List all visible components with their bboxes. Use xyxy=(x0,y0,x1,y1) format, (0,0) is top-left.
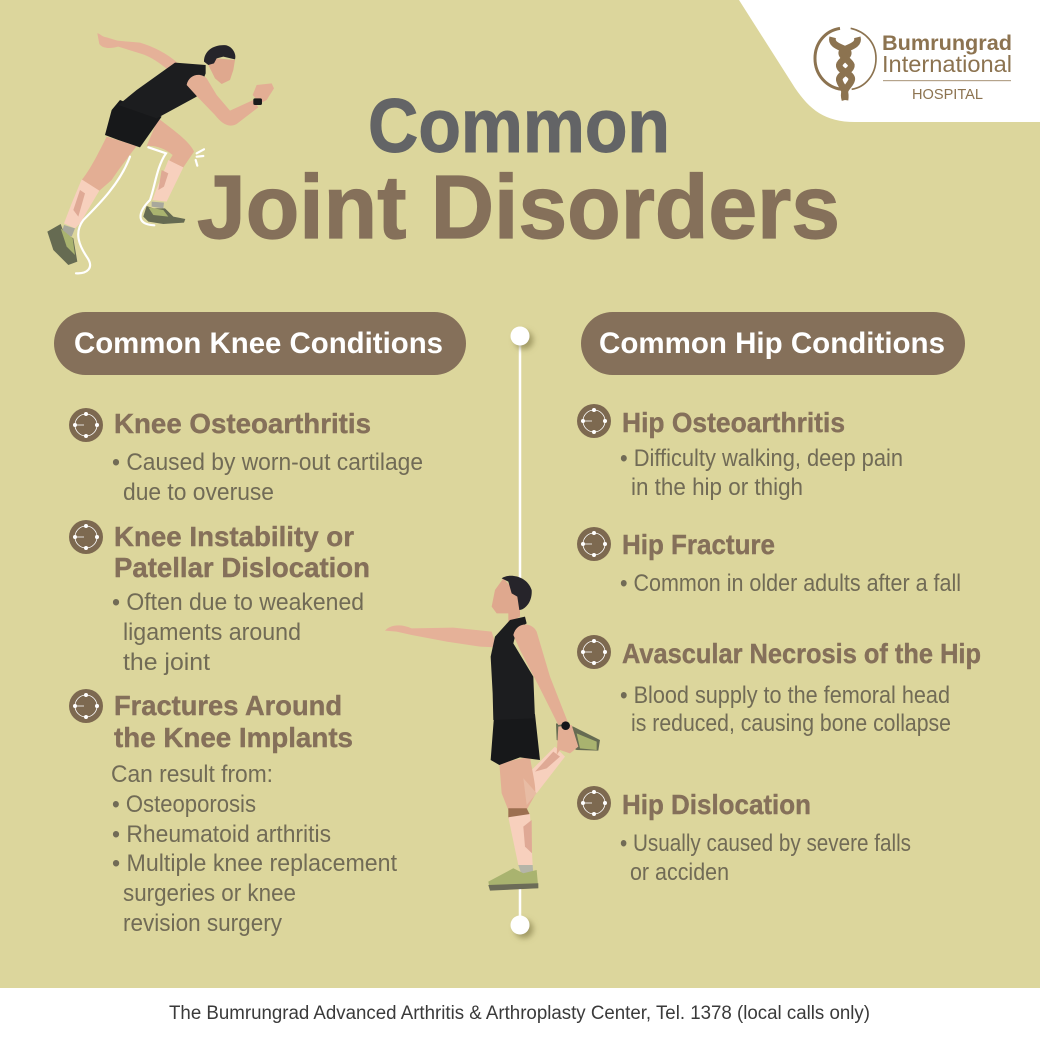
knee: osteoarthritis: Knee Osteoarthritis xyxy=(114,408,371,439)
logo wordmark: Bumrungrad xyxy=(882,32,1012,55)
knee: instability: Patellar Dislocation xyxy=(114,552,370,583)
hip: osteoarthritis: Hip Osteoarthritis xyxy=(622,407,845,438)
title: Common xyxy=(368,84,670,169)
knee: instability: ligaments around xyxy=(123,619,301,646)
hip: avascular necrosis: Avascular Necrosis of the Hip xyxy=(622,638,981,669)
hip: avascular necrosis: is reduced, causing bone collapse xyxy=(631,710,951,737)
pill: knee heading xyxy=(54,312,466,375)
knee: instability: the joint xyxy=(123,649,210,676)
footer: The Bumrungrad Advanced Arthritis & Arthroplasty Center, Tel. 1378 (local calls only) xyxy=(169,1003,870,1024)
hip: osteoarthritis: • Difficulty walking, deep pain xyxy=(620,445,903,472)
head xyxy=(208,58,235,84)
motion lines xyxy=(76,147,204,273)
back arm xyxy=(513,625,568,725)
knee: instability: • Often due to weakened xyxy=(112,589,364,616)
neck and face xyxy=(492,578,520,623)
hair xyxy=(502,576,532,610)
timeline line xyxy=(519,336,521,925)
knee: osteoarthritis xyxy=(69,408,423,506)
knee: fractures: • Osteoporosis xyxy=(112,791,256,818)
icon: hip dislocation xyxy=(577,786,611,820)
knee: osteoarthritis: • Caused by worn-out cartilage xyxy=(112,449,423,476)
icon: instability xyxy=(69,520,103,554)
knee: instability xyxy=(69,520,370,676)
timeline top dot xyxy=(510,326,530,346)
raised calf xyxy=(523,747,565,793)
footer xyxy=(0,988,1040,1040)
hand and watch xyxy=(557,725,578,755)
logo wordmark xyxy=(882,32,1012,103)
timeline bottom dot xyxy=(510,916,530,934)
hip: osteoarthritis xyxy=(577,404,903,501)
icon: fractures xyxy=(69,689,103,723)
title: Joint Disorders xyxy=(197,158,840,258)
knee: fractures: surgeries or knee xyxy=(123,880,296,907)
logo wordmark: International xyxy=(882,51,1012,77)
icon: osteoarthritis xyxy=(69,408,103,442)
pill: hip heading xyxy=(581,312,965,375)
knee: fractures: Can result from: xyxy=(111,761,273,788)
title xyxy=(197,84,840,258)
shorts xyxy=(491,714,540,765)
torso xyxy=(491,617,535,720)
shorts xyxy=(105,100,162,147)
figure: stretching man xyxy=(385,576,600,891)
front leg xyxy=(147,118,194,168)
raised foot xyxy=(556,723,600,751)
icon: hip osteoarthritis xyxy=(577,404,611,438)
back arm xyxy=(97,33,177,70)
hip: fracture: Hip Fracture xyxy=(622,529,775,560)
icon: hip fracture xyxy=(577,527,611,561)
hip: fracture: • Common in older adults after a fall xyxy=(620,570,961,597)
hip: avascular necrosis: • Blood supply to the femoral head xyxy=(620,682,950,709)
logo emblem xyxy=(815,28,876,100)
back leg xyxy=(82,137,137,192)
knee: fractures: • Rheumatoid arthritis xyxy=(112,821,331,848)
torso xyxy=(118,63,206,118)
knee: fractures: the Knee Implants xyxy=(114,722,353,753)
knee: instability: Knee Instability or xyxy=(114,521,354,552)
front arm xyxy=(187,75,258,126)
knee: fractures: revision surgery xyxy=(123,910,282,937)
logo wordmark: HOSPITAL xyxy=(912,86,983,103)
hip: dislocation: • Usually caused by severe falls xyxy=(620,830,911,857)
standing shin xyxy=(508,808,530,818)
knee: osteoarthritis: due to overuse xyxy=(123,479,274,506)
hip: fracture xyxy=(577,527,961,597)
figure: runner xyxy=(47,33,274,273)
standing shoe xyxy=(488,868,538,890)
forward arm xyxy=(385,625,497,647)
hip: avascular necrosis xyxy=(577,635,981,737)
hip: dislocation: or acciden xyxy=(630,859,729,886)
hip: dislocation: Hip Dislocation xyxy=(622,789,811,820)
knee: fractures xyxy=(69,689,397,937)
knee: fractures: Fractures Around xyxy=(114,690,342,721)
logo xyxy=(815,28,1012,103)
pill: hip heading: Common Hip Conditions xyxy=(599,327,945,360)
standing thigh xyxy=(499,757,535,810)
hip: dislocation xyxy=(577,786,911,886)
icon: avascular necrosis xyxy=(577,635,611,669)
hip: osteoarthritis: in the hip or thigh xyxy=(631,474,803,501)
knee: fractures: • Multiple knee replacement xyxy=(112,850,397,877)
logo panel xyxy=(739,0,1040,122)
pill: knee heading: Common Knee Conditions xyxy=(74,327,443,360)
